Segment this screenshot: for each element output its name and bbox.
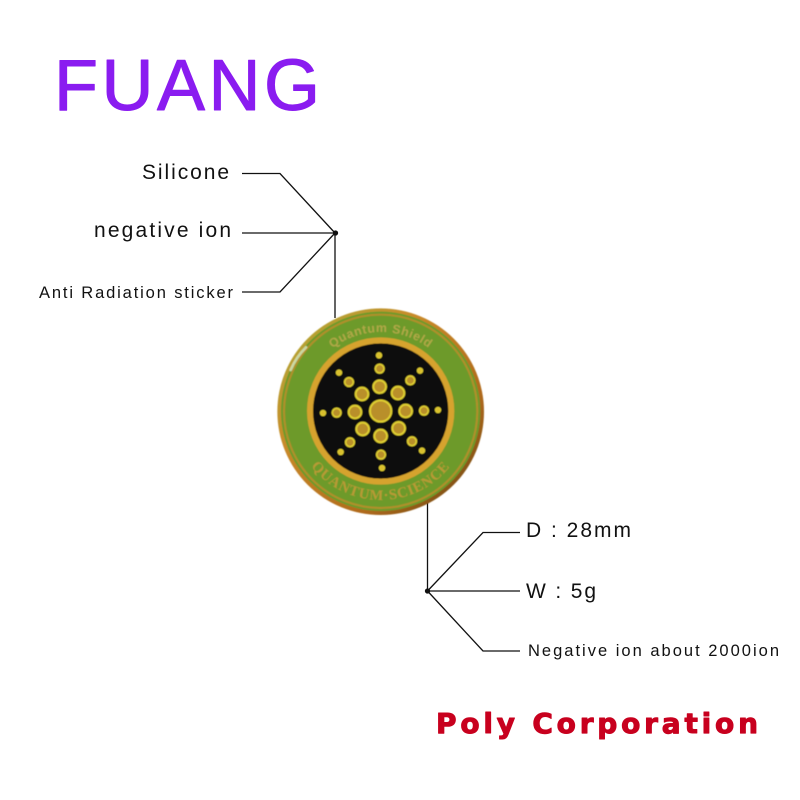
- label: Anti Radiation sticker: Anti Radiation sticker: [39, 284, 234, 302]
- badge: Quantum Shield sticker: [276, 308, 485, 516]
- badge green band: [281, 312, 480, 511]
- label: D 28mm: D : 28mm: [526, 519, 631, 542]
- badge gold ring and black centre: [310, 340, 451, 482]
- badge starburst dots: [320, 353, 441, 471]
- label: Negative ion about 2000ion: Negative ion about 2000ion: [528, 642, 779, 660]
- badge highlight: [291, 347, 306, 370]
- badge bottom text: QUANTUM·SCIENCE: [312, 461, 450, 501]
- badge rim: [277, 308, 484, 515]
- brand title: FUANG: FUANG: [54, 46, 320, 126]
- badge top text: Quantum Shield: [329, 324, 434, 348]
- label: Silicone: Silicone: [142, 161, 229, 184]
- callout lines: upper material labels: [242, 174, 338, 318]
- label: W 5g: W : 5g: [526, 580, 596, 603]
- label: negative ion: negative ion: [94, 219, 231, 242]
- callout lines: lower specification labels: [426, 500, 520, 651]
- company name: Poly Corporation: Poly Corporation: [436, 707, 758, 740]
